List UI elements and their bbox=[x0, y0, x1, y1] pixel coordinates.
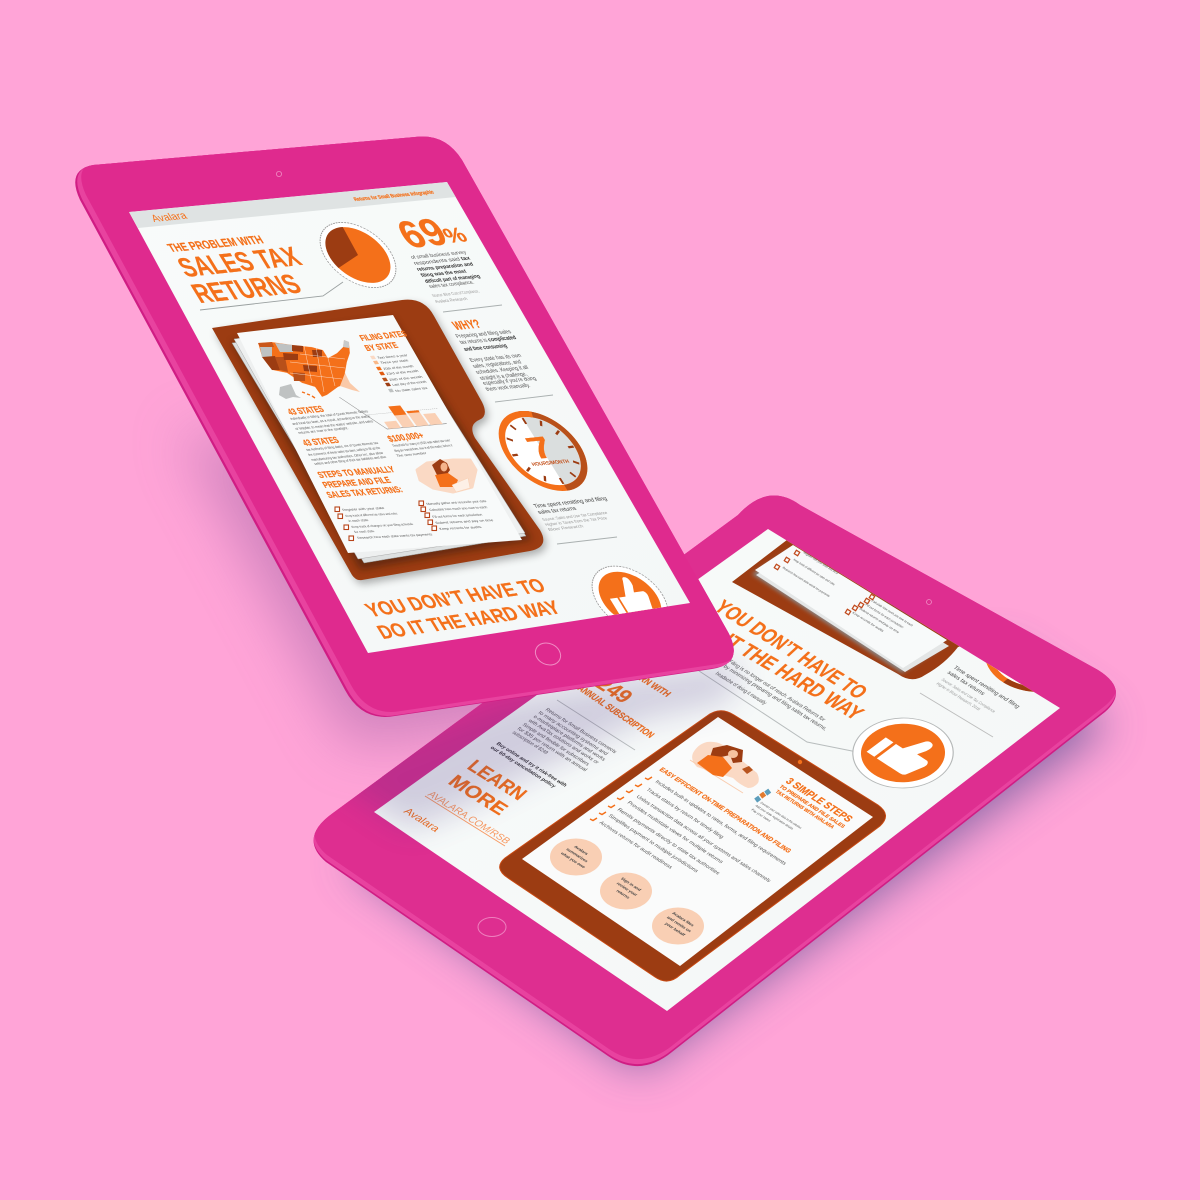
steps heading: PREPARE AND FILE bbox=[321, 476, 394, 491]
filing dates legend: FILING DATES bbox=[358, 329, 409, 343]
checklist text: Submit returns and pay on time bbox=[858, 607, 900, 634]
why text: and time consuming bbox=[462, 343, 509, 353]
logo: avalara: Avalara bbox=[149, 210, 190, 225]
paper stack bbox=[752, 545, 949, 673]
main page bbox=[237, 315, 522, 553]
filing dates legend: 20th of the month bbox=[382, 364, 414, 371]
checklist left: Keep track of changes on your filing schedule bbox=[350, 522, 414, 529]
inner tablet bbox=[500, 711, 886, 981]
inner screen bbox=[522, 717, 873, 966]
heading: easy efficient: EASY EFFICIENT ON-TIME PREPARATION AND FILING bbox=[657, 767, 792, 854]
43 states block 2: the commerce of these sales tax laws, selling to fill up the bbox=[307, 446, 381, 457]
screen content bbox=[129, 182, 682, 643]
$100,000+ block: filing per transactions, new in all this matter, before it bbox=[393, 444, 453, 453]
intro paragraph: by minimizing preparing and filing sales tax returns, bbox=[721, 664, 828, 732]
checklist right: Keep records for audits bbox=[438, 525, 483, 531]
steps heading: SALES TAX RETURNS: bbox=[325, 485, 405, 501]
43 states block 2: tax Authority of filing dates, etc of Quote Remote tax bbox=[305, 441, 379, 452]
title: SALES TAX bbox=[172, 242, 307, 283]
pricing block: $249 bbox=[581, 667, 638, 707]
stat description: sales tax compliance. bbox=[428, 280, 476, 290]
time spent text: Higher in Bloor Research, 2018 bbox=[935, 681, 982, 711]
link: AVALARA.COM/RSB bbox=[425, 790, 512, 846]
feature list: Simplifies payment to multiple jurisdictions bbox=[606, 813, 699, 874]
why heading: WHY? bbox=[450, 317, 483, 333]
43 states block 2 bbox=[301, 435, 387, 466]
time spent text: Source: Sales and Use Tax Compliance bbox=[541, 510, 609, 522]
step circle 3: and remits on bbox=[666, 915, 693, 933]
stat description: respondents said tax bbox=[413, 256, 473, 267]
step circle 2: review your bbox=[615, 881, 639, 897]
why text bbox=[454, 329, 538, 393]
description paragraph: to many accounting systems and bbox=[536, 710, 609, 757]
pricing block: RETURN WITH bbox=[618, 663, 673, 699]
divider bbox=[920, 693, 993, 737]
3 simple steps: Pay your taxes bbox=[750, 808, 772, 823]
home button bbox=[478, 918, 506, 936]
step circle 2 bbox=[600, 872, 652, 910]
divider bbox=[557, 700, 635, 750]
checklist left: Research how each state wants tax payments bbox=[356, 533, 433, 540]
why text: tax returns is complicated bbox=[458, 335, 518, 346]
checklist text: Research how each state wants tax payments bbox=[781, 566, 831, 598]
$100,000+ block: Threshold for many in 2019 was sales tax over bbox=[391, 439, 452, 448]
clock remnant bbox=[986, 662, 1034, 692]
description paragraph: e-marketplace platforms and works bbox=[531, 714, 607, 762]
home button bbox=[532, 639, 564, 669]
time spent text bbox=[532, 496, 609, 532]
heading: you don't have to bbox=[361, 575, 565, 643]
time spent text: sales tax returns bbox=[536, 505, 578, 516]
intro paragraph: headache of doing it manually bbox=[713, 671, 767, 706]
map of United States bbox=[258, 340, 360, 399]
callout line bbox=[698, 670, 852, 752]
intro paragraph: Filing is no longer out of reach. Avalara Returns for bbox=[726, 659, 826, 723]
43 states block 2: manufacturing tax authorities. Other Inc. also allow bbox=[310, 451, 384, 462]
description paragraph: Returns for Small Business connects bbox=[543, 707, 618, 755]
feature list: Unites transaction data across all your systems and sales channels bbox=[634, 794, 772, 884]
buy online note: our 60-day cancellation policy bbox=[488, 745, 557, 789]
illustration: woman with coffee bbox=[690, 742, 759, 793]
heading: you don't have to: DO IT THE HARD WAY bbox=[690, 614, 870, 724]
heading: you don't have to: DO IT THE HARD WAY bbox=[373, 597, 565, 643]
tablet body bbox=[75, 136, 734, 717]
shadow: lower tablet bbox=[345, 650, 1110, 1072]
43 states block 1: and local tax laws, as a result, according to the status bbox=[291, 415, 371, 426]
checklist right: Manually gather and reconcile your data bbox=[425, 499, 487, 506]
3 simple steps: Connect your sales data to the solution bbox=[759, 801, 803, 830]
description paragraph: subscription of $249 bbox=[510, 730, 549, 755]
time spent text: Source: Sales and Use Tax Compliance bbox=[940, 677, 997, 714]
43 states block 1: of Wayfair, to mean that the states' website, and sales bbox=[294, 420, 374, 431]
3 simple steps: TO PREPARE AND FILE SALES bbox=[777, 784, 846, 829]
why text: them work manually. bbox=[484, 382, 532, 393]
title: THE PROBLEM WITH bbox=[165, 233, 266, 255]
learn more: MORE bbox=[443, 772, 512, 819]
description paragraph bbox=[510, 707, 618, 773]
cast shadow of upper tablet bbox=[320, 660, 740, 830]
header title: Returns for Small Business Infographic bbox=[353, 190, 436, 203]
filing dates legend bbox=[358, 329, 429, 393]
shadow: upper tablet bbox=[180, 430, 690, 745]
checklist left: for each state bbox=[353, 529, 375, 534]
why text: Every state has its own bbox=[468, 352, 523, 364]
step circle 2: Sign in and bbox=[620, 876, 643, 892]
why text: Preparing and filing sales bbox=[454, 329, 513, 340]
stat description: returns preparation and bbox=[416, 262, 475, 273]
checklist right bbox=[419, 499, 494, 531]
filing dates legend: BY STATE bbox=[363, 341, 400, 353]
feature list: Tracks status by return for timely filing bbox=[644, 787, 725, 840]
clock: 7 hours per month bbox=[486, 409, 600, 493]
screen bbox=[129, 182, 690, 653]
stat description: of small business survey bbox=[410, 250, 468, 261]
checklist text: Keep track of different tax rates and rules bbox=[792, 558, 836, 586]
steps heading: STEPS TO MANUALLY bbox=[316, 465, 398, 481]
pricing block: ANNUAL SUBSCRIPTION bbox=[575, 684, 656, 740]
title bbox=[166, 235, 304, 303]
checklist left: Keep track of different tax rates and rules bbox=[344, 512, 398, 518]
checklist text: Register with your state and local bbox=[802, 551, 839, 575]
$100,000+ block: The new number bbox=[395, 451, 428, 458]
checklist text: Fill out forms for each jurisdiction bbox=[864, 603, 905, 629]
tablet body bbox=[314, 496, 1116, 1066]
learn more: LEARN bbox=[462, 757, 531, 804]
callout line bbox=[200, 282, 343, 310]
checklist text: Keep records for audits bbox=[851, 611, 885, 633]
folder shadow bbox=[215, 304, 546, 584]
why text: straight is a challenge, bbox=[478, 371, 529, 382]
stat description bbox=[410, 250, 482, 304]
why text: sales, registrations, and bbox=[471, 359, 523, 370]
3 simple steps bbox=[750, 776, 855, 831]
pie chart bbox=[306, 219, 410, 291]
step circle 3 bbox=[652, 908, 704, 944]
step circle 1 bbox=[550, 838, 602, 876]
clock: 7 hours per month: 7 bbox=[520, 431, 561, 466]
43 states block 2: sellers and other filing of their tax liabilities and also bbox=[313, 455, 387, 466]
feature list: Includes built-in updates to rates, forms, and filing requirements bbox=[653, 779, 788, 867]
time spent text: sales tax returns bbox=[945, 670, 986, 697]
hawaii bbox=[302, 392, 315, 398]
description paragraph: for $35 per return with an annual bbox=[515, 726, 588, 773]
upper tablet bbox=[75, 136, 734, 717]
icon: thumbs up bbox=[578, 562, 682, 636]
checklist left: Register with your state bbox=[341, 506, 385, 512]
$100,000+ block bbox=[386, 431, 453, 458]
pricing block bbox=[577, 678, 672, 738]
time spent text: Time spent remitting and filing bbox=[532, 496, 609, 510]
buy online note: Buy online and try it risk-free with bbox=[494, 741, 568, 788]
checklist right: Submit returns and pay on time bbox=[434, 518, 494, 525]
paper stack shadow bbox=[232, 318, 532, 570]
step circle 1: what you owe bbox=[559, 851, 587, 869]
3 simple steps: TAX RETURNS WITH AVALARA bbox=[773, 789, 835, 830]
time spent text: Time spent remitting and filing bbox=[951, 665, 1021, 710]
folder remnant bbox=[732, 540, 960, 680]
description paragraph: with AvaTax solutions and works or bbox=[526, 718, 600, 765]
screen bbox=[374, 529, 1060, 1011]
43 states block 1: Individually in billing, the total of Quote Remote Sellers bbox=[289, 410, 369, 421]
stat description: Avalara Research bbox=[434, 296, 469, 304]
camera bbox=[926, 600, 932, 604]
filing dates legend: 23rd of the month bbox=[385, 369, 419, 376]
stat description: filing was the most bbox=[420, 269, 468, 279]
3 simple steps: 3 SIMPLE STEPS bbox=[783, 776, 855, 824]
lower tablet bbox=[314, 496, 1116, 1066]
icon: thumbs up bbox=[852, 718, 954, 788]
checklist text: Manually gather and reconcile your data bbox=[876, 594, 922, 623]
filing dates legend: Two times a year bbox=[376, 353, 409, 360]
43 states block 1: returns are now in the spotlight. bbox=[297, 426, 349, 435]
heading: you don't have to: YOU DON’T HAVE TO bbox=[709, 596, 873, 703]
step circle 1: summarizes bbox=[565, 847, 590, 864]
bar chart bbox=[339, 389, 449, 431]
clock: 7 hours per month: HOURS/MONTH bbox=[531, 459, 571, 468]
time spent text: Higher in Taxes from the Tax Price bbox=[544, 516, 609, 527]
feature list: Provides multistate views for multiple returns bbox=[625, 800, 724, 865]
illustration: woman at laptop bbox=[417, 459, 476, 492]
why text: schedules. Keeping it all bbox=[474, 364, 530, 376]
heading: you don't have to: YOU DON’T HAVE TO bbox=[361, 575, 550, 621]
logo: avalara: Avalara bbox=[401, 806, 443, 835]
feature list: Archives returns for audit readiness bbox=[597, 820, 674, 870]
filing dates legend: Last day of the month bbox=[391, 380, 427, 387]
folder bbox=[212, 300, 543, 580]
stat: 69%: % bbox=[438, 223, 472, 247]
checklist right: Calculate how much you owe to each bbox=[428, 505, 488, 512]
checklist left bbox=[335, 506, 433, 540]
stat: 69%: 69 bbox=[389, 211, 456, 256]
43 states block 2: 43 STATES bbox=[301, 435, 342, 449]
time spent text: Bloor Research bbox=[547, 524, 585, 532]
heading: you don't have to bbox=[716, 599, 866, 718]
step circle 2: returns bbox=[615, 889, 632, 900]
feature list: Remits payments directly to state tax authorities bbox=[615, 807, 721, 876]
checklist right: Fill out forms for each jurisdiction bbox=[431, 513, 483, 519]
43 states block 1: 43 STATES bbox=[286, 404, 327, 418]
checklist boxes bbox=[774, 550, 875, 615]
steps heading bbox=[316, 465, 405, 501]
filing dates legend: No state sales tax bbox=[394, 386, 429, 393]
stat description: difficult part of managing bbox=[424, 274, 482, 285]
title: RETURNS bbox=[186, 269, 307, 309]
step circle 1: Avalara bbox=[573, 844, 590, 856]
dividers bbox=[443, 305, 502, 312]
description paragraph: Simple and flexible for subscribers bbox=[520, 722, 591, 767]
3 simple steps: Add your state registration details bbox=[754, 804, 794, 831]
checklist left: in each state bbox=[347, 518, 369, 523]
step circle 3: Avalara files bbox=[671, 911, 696, 928]
alaska bbox=[279, 384, 301, 399]
$100,000+ block: $100,000+ bbox=[386, 431, 427, 445]
back sheets bbox=[232, 322, 526, 563]
43 states block 1 bbox=[286, 404, 374, 435]
filing dates legend: Three per state bbox=[379, 359, 409, 365]
checklist text: Calculate how much you owe to each bbox=[870, 599, 914, 627]
camera bbox=[276, 171, 282, 177]
check marks bbox=[590, 777, 652, 820]
checklist text bbox=[781, 551, 922, 634]
screen content bbox=[401, 530, 1114, 981]
header band bbox=[129, 182, 456, 228]
step circle 3: your behalf bbox=[664, 921, 687, 937]
stat description: Source: Bloor Cost of Compliance, bbox=[431, 289, 480, 298]
learn more bbox=[448, 760, 528, 816]
feature list bbox=[597, 779, 788, 884]
why text: especially if you’re doing bbox=[481, 375, 538, 387]
camera dot bbox=[798, 760, 802, 764]
filing dates legend: 25th of the month bbox=[388, 375, 423, 382]
